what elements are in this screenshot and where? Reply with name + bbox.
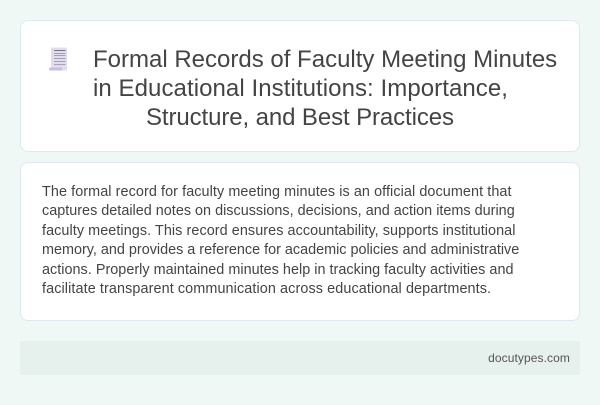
icon: document scroll [49, 47, 67, 70]
description text [42, 184, 519, 297]
description text: memory, and provides a reference for academic policies and administrative [42, 242, 519, 258]
panel: title card [20, 20, 580, 152]
title: Formal Records of Faculty Meeting Minutes [93, 46, 557, 73]
footer text: site name: docutypes.com [488, 351, 570, 365]
description text: The formal record for faculty meeting minutes is an official document that [42, 184, 512, 200]
description text: captures detailed notes on discussions, decisions, and action items during [42, 203, 515, 219]
title: in Educational Institutions: Importance, [93, 75, 508, 102]
footer bar [20, 341, 580, 374]
description text: actions. Properly maintained minutes help in tracking faculty activities and [42, 262, 514, 278]
title: Structure, and Best Practices [146, 104, 454, 131]
title [93, 46, 557, 131]
description text: faculty meetings. This record ensures accountability, supports institutional [42, 223, 516, 239]
panel: description card [20, 162, 580, 321]
description text: facilitate transparent communication across educational departments. [42, 281, 491, 297]
